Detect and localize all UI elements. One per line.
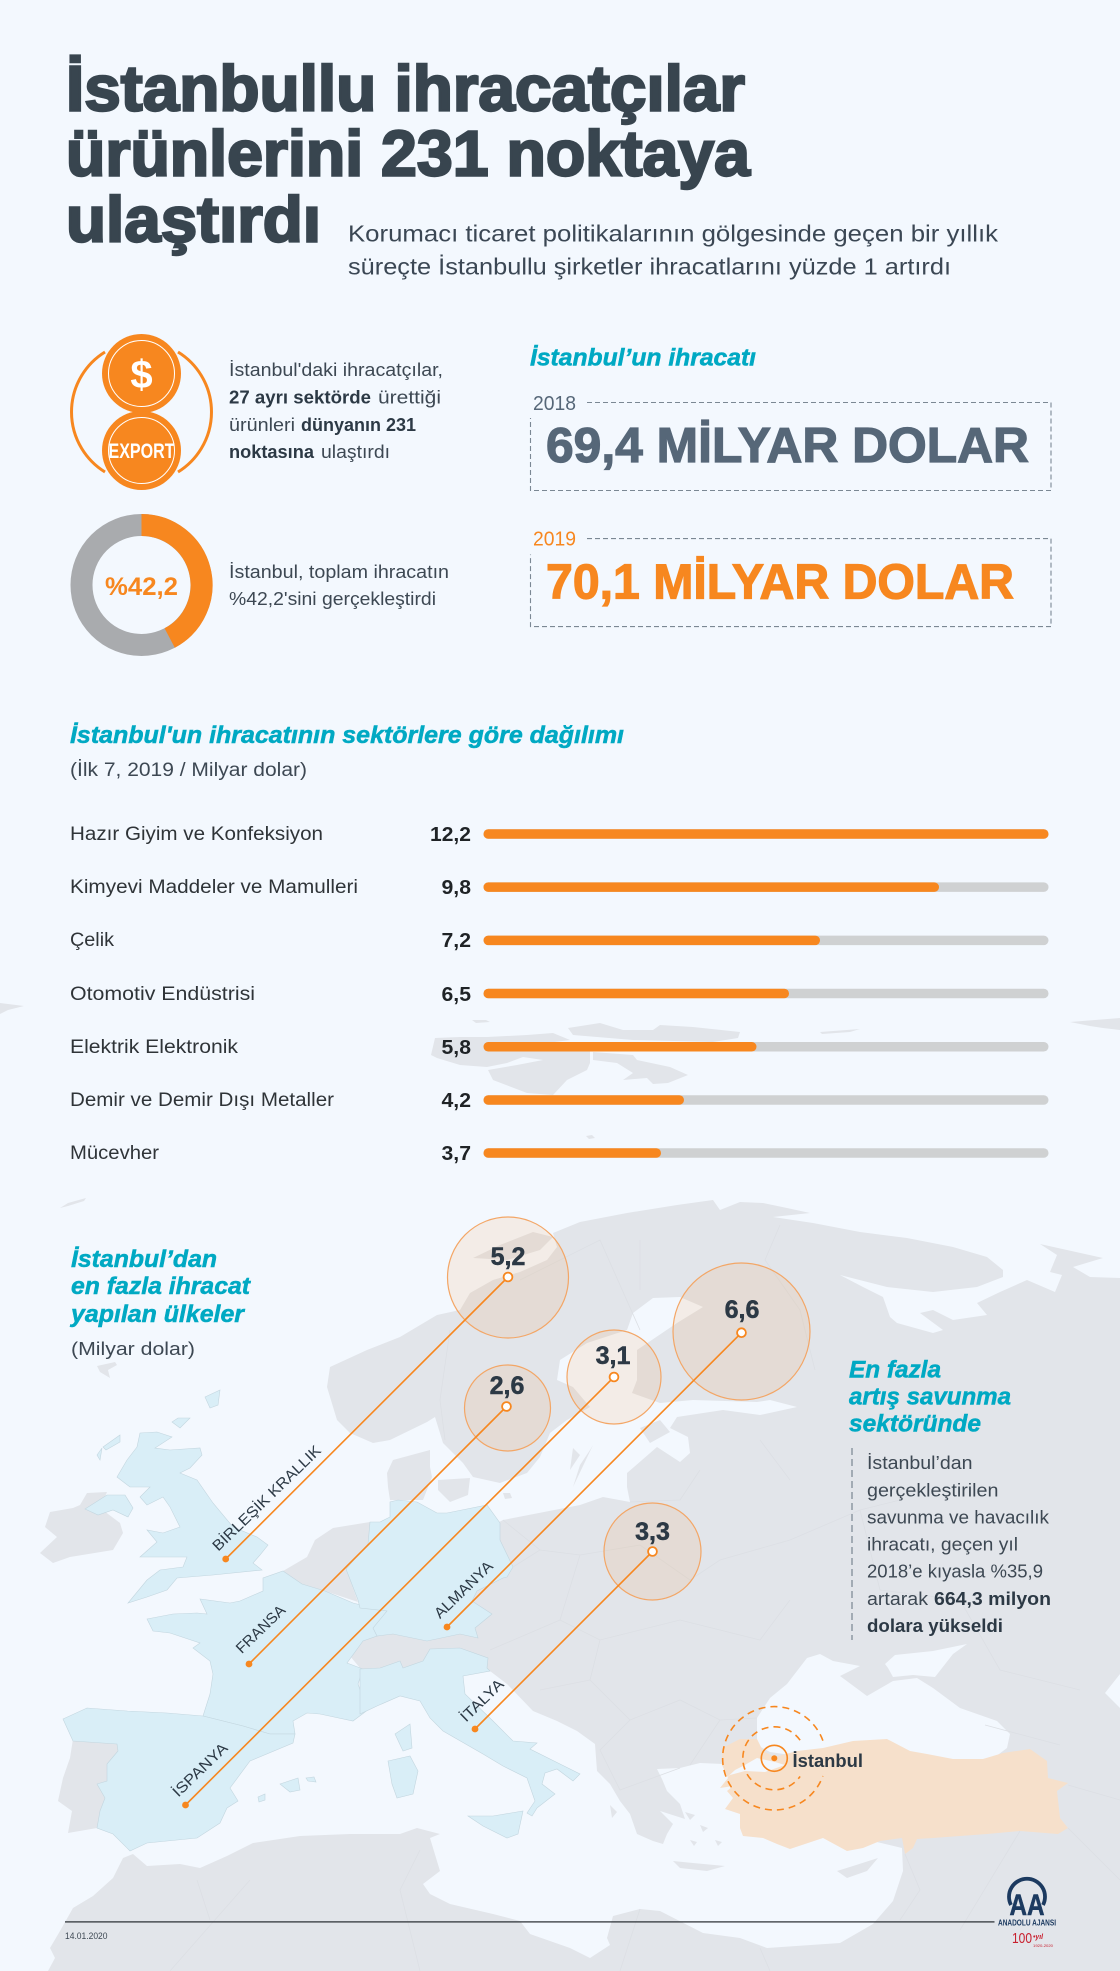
bubble: İtalya 3,3: İTALYA — [456, 1675, 508, 1726]
heading: top export countries: İstanbul’dan — [71, 1246, 217, 1273]
heading: sector breakdown: (İlk 7, 2019 / Milyar dolar) — [70, 760, 307, 781]
bar row: Demir: Demir ve Demir Dışı Metaller — [70, 1090, 335, 1111]
logo: Anadolu Ajansı: AA — [1010, 1889, 1044, 1922]
map: land mass — [48, 1200, 1120, 1971]
bar row: Elektrik: 5,8 — [442, 1037, 471, 1059]
marker: Istanbul: İstanbul — [792, 1751, 863, 1771]
bar row: Kimyevi: Kimyevi Maddeler ve Mamulleri — [70, 877, 358, 898]
heading: top export countries: yapılan ülkeler — [70, 1301, 246, 1328]
map: Greek islands, Crete, Cyprus — [610, 1805, 878, 1878]
text: share note — [229, 562, 449, 609]
map: Arctic and Nordic islands — [0, 1003, 1120, 1487]
title: ulaştırdı — [66, 184, 321, 256]
bar row: Otomotiv — [70, 984, 1048, 1006]
bubble: İspanya 3,1 — [169, 1330, 661, 1808]
callout: defence sector: 664,3 milyon — [934, 1589, 1051, 1609]
bar row: Kimyevi — [70, 877, 1048, 899]
title: ürünlerini 231 noktaya — [66, 118, 750, 190]
footer rule and date: 14.01.2020 — [65, 1931, 108, 1942]
bubble: İtalya 3,3 — [456, 1503, 701, 1732]
bubble: Fransa 2,6 — [233, 1365, 550, 1667]
donut chart: 42.2 percent — [82, 525, 202, 645]
panel: 2018 export: 2018 — [533, 393, 576, 415]
text: exporters note: ulaştırdı — [321, 442, 390, 462]
subtitle — [348, 220, 999, 280]
bar row: Hazır Giyim: Hazır Giyim ve Konfeksiyon — [70, 824, 323, 845]
text: exporters note — [229, 360, 443, 462]
bar row: Otomotiv: 6,5 — [442, 984, 471, 1006]
title — [66, 52, 750, 256]
bar row: Hazır Giyim — [70, 824, 1048, 846]
panel: 2018 export: 69,4 MİLYAR DOLAR — [546, 419, 1029, 473]
icon: dollar and export coins: EXPORT — [108, 440, 175, 463]
bubble: Almanya 6,6: 6,6 — [725, 1296, 759, 1324]
map: Germany — [346, 1500, 513, 1641]
bubble: Birleşik Krallık 5,2: BİRLEŞİK KRALLIK — [209, 1442, 325, 1555]
bar row: Demir — [70, 1090, 1048, 1112]
panel: 2018 export — [530, 393, 1051, 490]
text: exporters note: 27 ayrı sektörde — [229, 388, 371, 408]
callout: defence sector: gerçekleştirilen — [867, 1480, 998, 1500]
bar row: Mücevher — [70, 1143, 1048, 1165]
subtitle: Korumacı ticaret politikalarının gölgesinde geçen bir yıllık — [348, 220, 999, 246]
bubble: Fransa 2,6: FRANSA — [233, 1602, 289, 1657]
callout: defence sector: En fazla — [849, 1356, 941, 1384]
bubble: Fransa 2,6: 2,6 — [490, 1372, 524, 1400]
text: exporters note: noktasına — [229, 442, 315, 462]
bar row: Çelik: Çelik — [70, 930, 115, 951]
map: Spain — [63, 1708, 316, 1851]
map: national borders — [170, 1225, 1120, 1971]
text: share note: İstanbul, toplam ihracatın — [229, 562, 449, 582]
callout: defence sector: artarak — [867, 1589, 929, 1609]
bubble: İspanya 3,1: İSPANYA — [169, 1739, 231, 1801]
bar row: Mücevher: 3,7 — [442, 1143, 471, 1165]
bar row: Çelik — [70, 930, 1048, 952]
callout: defence sector: savunma ve havacılık — [867, 1508, 1050, 1528]
callout: defence sector: dolara yükseldi — [867, 1616, 1003, 1636]
map: Portugal — [58, 1739, 118, 1833]
text: exporters note: dünyanın 231 — [301, 415, 416, 435]
bar row: Çelik: 7,2 — [442, 930, 471, 952]
bar row: Otomotiv: Otomotiv Endüstrisi — [70, 984, 255, 1005]
heading: Istanbul exports: İstanbul’un ihracatı — [530, 344, 756, 372]
title: İstanbullu ihracatçılar — [66, 52, 745, 124]
text: share note: %42,2'sini gerçekleştirdi — [229, 589, 436, 609]
heading: top export countries: (Milyar dolar) — [71, 1339, 195, 1359]
bubble: Almanya 6,6 — [431, 1263, 810, 1630]
map: France — [147, 1571, 387, 1734]
background map of Europe — [0, 1003, 1120, 1971]
bar row: Elektrik: Elektrik Elektronik — [70, 1037, 239, 1058]
callout: defence sector: 2018’e kıyasla %35,9 — [867, 1562, 1043, 1582]
bar row: Elektrik — [70, 1037, 1048, 1059]
bar chart: sectors — [70, 824, 1048, 1165]
bubble: İspanya 3,1: 3,1 — [596, 1342, 630, 1370]
bar row: Mücevher: Mücevher — [70, 1143, 160, 1164]
marker: Istanbul — [723, 1707, 863, 1810]
panel: 2019 export: 70,1 MİLYAR DOLAR — [546, 556, 1014, 610]
callout: defence sector: sektöründe — [849, 1410, 981, 1438]
heading: sector breakdown: İstanbul'un ihracatının sektörlere göre dağılımı — [70, 722, 624, 749]
icon: dollar and export coins — [72, 334, 211, 490]
map: Ireland — [40, 1492, 123, 1563]
donut chart: 42.2 percent: %42,2 — [105, 573, 178, 601]
text: exporters note: ürünleri — [229, 415, 295, 435]
logo: Anadolu Ajansı — [998, 1879, 1056, 1948]
map: United Kingdom — [85, 1390, 268, 1603]
logo: Anadolu Ajansı: ANADOLU AJANSI — [998, 1918, 1056, 1928]
map: Sea of Marmara — [722, 1758, 785, 1782]
panel: 2019 export: 2019 — [533, 528, 576, 550]
text: exporters note: İstanbul'daki ihracatçılar, — [229, 360, 443, 380]
bubble: Almanya 6,6: ALMANYA — [431, 1558, 497, 1622]
map: Turkey — [720, 1739, 1068, 1854]
logo: Anadolu Ajansı: 100 — [1012, 1930, 1032, 1947]
heading: sector breakdown — [70, 722, 624, 781]
logo: Anadolu Ajansı: •yıl — [1033, 1934, 1044, 1941]
callout: defence sector: ihracatı, geçen yıl — [867, 1534, 1018, 1554]
callout: defence sector: İstanbul’dan — [867, 1453, 972, 1473]
bar row: Kimyevi: 9,8 — [442, 877, 471, 899]
heading: top export countries — [70, 1246, 251, 1359]
callout: defence sector: artış savunma — [849, 1384, 1011, 1410]
map: Italy, Corsica, Sardinia, Sicily — [360, 1648, 580, 1838]
icon: dollar and export coins: $ — [130, 353, 153, 397]
map: Denmark and Benelux in grey — [283, 1450, 512, 1602]
bubble: Birleşik Krallık 5,2: 5,2 — [491, 1243, 525, 1271]
bar row: Hazır Giyim: 12,2 — [430, 824, 471, 846]
bar row: Demir: 4,2 — [442, 1090, 471, 1112]
heading: top export countries: en fazla ihracat — [71, 1273, 251, 1300]
panel: 2019 export — [530, 528, 1051, 627]
subtitle: süreçte İstanbullu şirketler ihracatlarını yüzde 1 artırdı — [348, 254, 951, 280]
bubble: İtalya 3,3: 3,3 — [635, 1518, 670, 1546]
bubble: Birleşik Krallık 5,2 — [209, 1217, 569, 1562]
logo: Anadolu Ajansı: 1920-2020 — [1033, 1944, 1053, 1948]
callout: defence sector — [849, 1356, 1051, 1640]
text: exporters note: ürettiği — [378, 388, 441, 408]
